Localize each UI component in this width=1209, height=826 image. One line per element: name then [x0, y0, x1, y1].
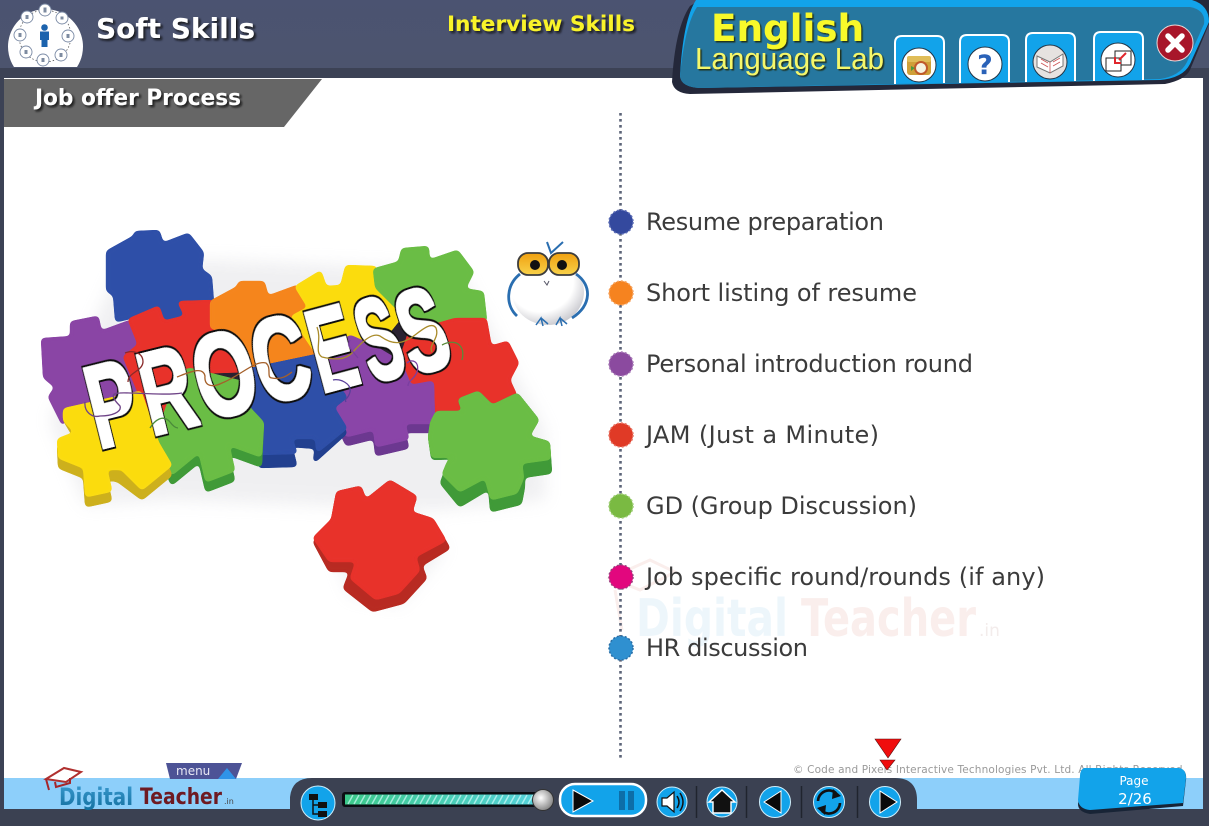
- section tab: Job offer Process: [4, 79, 322, 127]
- subject title: Interview Skills: Interview Skills: [447, 12, 635, 36]
- play and pause capsule: [560, 784, 646, 816]
- page indicator badge: Page: [1119, 774, 1149, 788]
- step 2: Short listing of resume: Short listing of resume: [646, 279, 917, 307]
- puzzle piece: green top right: [375, 248, 485, 333]
- word: PROCESS: R: [126, 320, 208, 461]
- puzzle seam lines across word: [85, 326, 463, 428]
- puzzle piece: blue top: [108, 232, 212, 323]
- title: Soft Skills: Soft Skills: [96, 12, 255, 45]
- word: PROCESS: P: [73, 334, 151, 474]
- step 5: GD (Group Discussion): GD (Group Discussion): [646, 492, 917, 520]
- owl mascot: [509, 242, 588, 326]
- puzzle piece: blue centre: [247, 355, 345, 466]
- page indicator badge: 2/26: [1118, 790, 1152, 808]
- puzzle piece: red lone: [315, 482, 448, 610]
- puzzle piece: purple left: [43, 318, 140, 423]
- puzzle piece: yellow top: [293, 267, 403, 360]
- icon: home: [707, 787, 737, 817]
- step 3: Personal introduction round: Personal introduction round: [646, 350, 973, 378]
- icon: resize button: [1094, 32, 1143, 81]
- page indicator badge: [1078, 768, 1186, 814]
- puzzle soft shadow: [50, 260, 545, 605]
- icon: previous: [760, 786, 790, 818]
- icon: replay: [814, 786, 844, 818]
- puzzle backing seams: [70, 300, 440, 450]
- puzzle piece: red right: [400, 320, 517, 413]
- media control panel: [290, 778, 917, 826]
- icon: clock folder button: [895, 36, 944, 84]
- word: PROCESS: S: [340, 271, 418, 408]
- icon: volume: [657, 787, 687, 817]
- watermark: Digital Teacher: [610, 560, 1000, 649]
- step 4: JAM (Just a Minute): JAM (Just a Minute): [644, 421, 879, 449]
- red pointer arrow: [875, 739, 901, 770]
- footer band: [0, 778, 1209, 826]
- process steps list: [609, 208, 1045, 662]
- word: PROCESS: O: [179, 303, 270, 446]
- puzzle piece: orange: [212, 283, 322, 378]
- watermark: Digital Teacher: .in: [979, 621, 1000, 641]
- puzzle piece: yellow: [59, 393, 170, 505]
- word: PROCESS: E: [295, 280, 370, 418]
- icon: close button: [1157, 25, 1193, 61]
- watermark: Digital Teacher: Digital: [636, 589, 788, 649]
- icon: help button: [960, 35, 1009, 83]
- progress bar: [342, 790, 554, 810]
- word: PROCESS: [73, 261, 464, 474]
- digital teacher logo: .in: [224, 797, 234, 806]
- step 7: HR discussion: HR discussion: [646, 634, 808, 662]
- puzzle piece: green centre: [157, 370, 262, 490]
- icon: help button: ?: [977, 50, 993, 81]
- icon: tree menu: [301, 786, 335, 820]
- puzzle piece: red upper: [125, 302, 250, 443]
- step 6: Job specific round/rounds (if any): Job specific round/rounds (if any): [644, 563, 1045, 591]
- header bar: [0, 0, 1209, 79]
- language lab heading: Language Lab: [695, 41, 884, 76]
- soft skills logo: [8, 4, 83, 67]
- menu tab: [166, 763, 242, 779]
- timeline dotted line: [619, 113, 622, 758]
- digital teacher logo: [46, 768, 234, 811]
- word: PROCESS: S: [381, 261, 464, 401]
- puzzle piece: purple right: [320, 337, 433, 454]
- puzzle piece: green lone: [430, 393, 550, 510]
- section tab: Job offer Process: Job offer Process: [33, 86, 241, 111]
- menu tab: menu: [176, 764, 210, 778]
- process puzzle illustration: [43, 232, 550, 610]
- icon: next: [870, 786, 900, 818]
- digital teacher logo: Digital: [59, 783, 133, 811]
- step 1: Resume preparation: Resume preparation: [646, 208, 884, 236]
- icon: book button: [1026, 33, 1075, 82]
- copyright notice: © Code and Pixels Interactive Technologies Pvt. Ltd. All Rights Reserved.: [793, 764, 1186, 776]
- english language lab panel: [672, 0, 1209, 94]
- english heading: English: [711, 7, 864, 50]
- digital teacher logo: Teacher: [140, 785, 222, 810]
- word: PROCESS: C: [238, 288, 323, 429]
- watermark: Digital Teacher: Teacher: [801, 589, 976, 649]
